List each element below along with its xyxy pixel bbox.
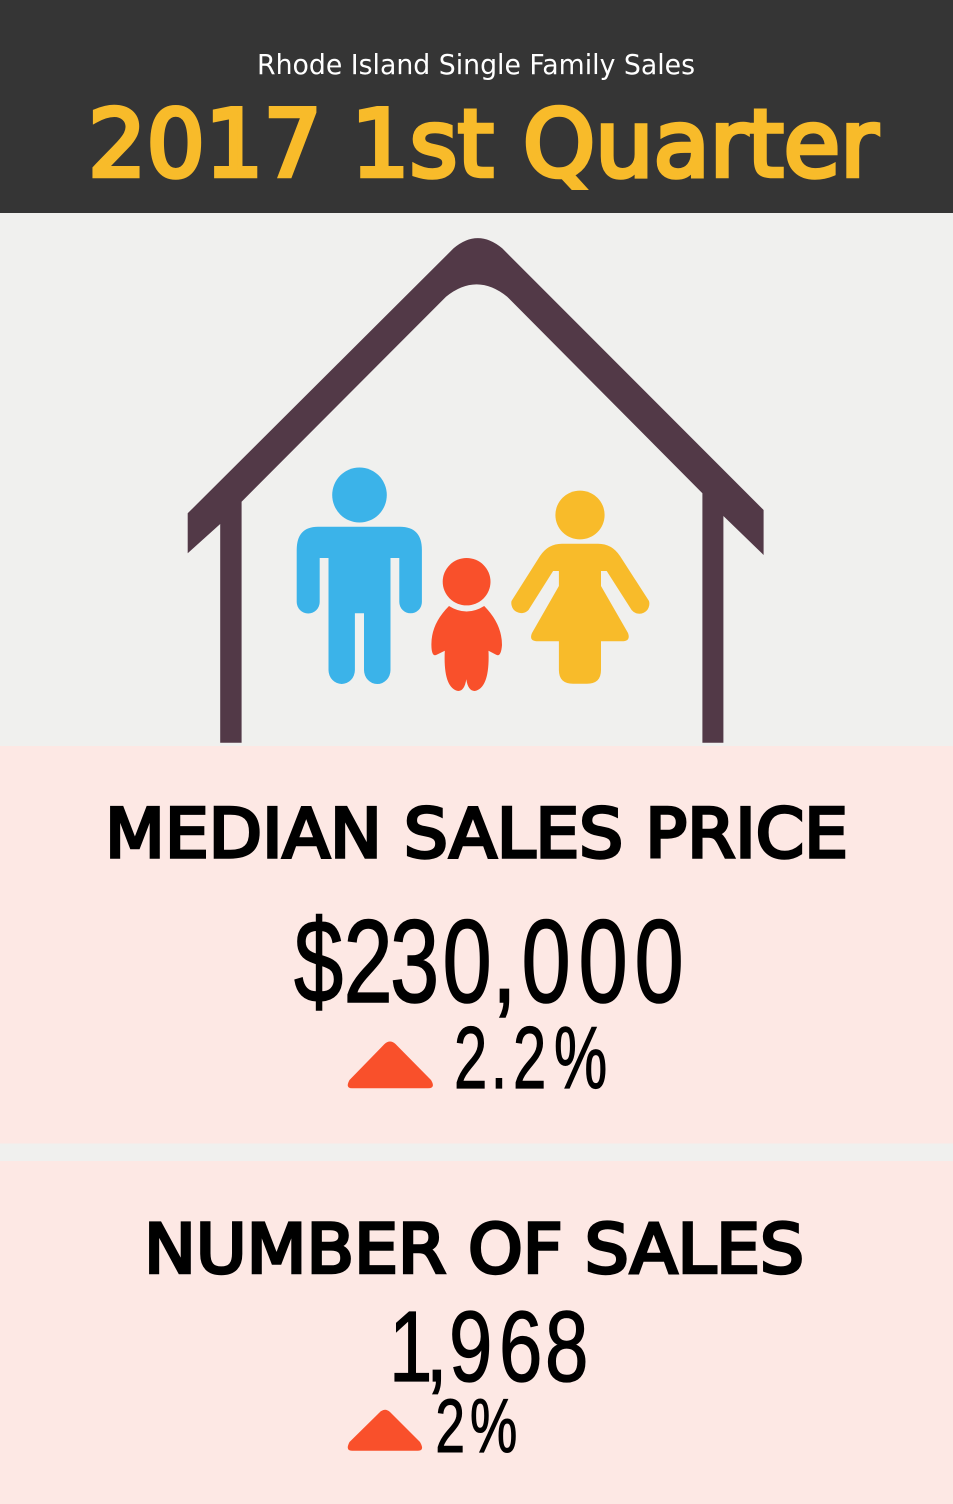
value: sales change: 2% [435, 1384, 517, 1468]
icon: woman [511, 491, 649, 684]
heading: number of sales: NUMBER OF SALES [144, 1210, 804, 1290]
icon: up arrow [348, 1410, 422, 1451]
value: price change: 2.2% [454, 1008, 607, 1107]
heading: median sales price: MEDIAN SALES PRICE [105, 795, 848, 874]
value: price: $230,000 [294, 897, 684, 1028]
value: sales count: 1,968 [389, 1292, 588, 1403]
panel: median sales price [0, 746, 953, 1144]
house illustration with family [188, 238, 764, 743]
panel: number of sales [0, 1161, 953, 1504]
header band [0, 0, 953, 213]
icon: up arrow [348, 1042, 433, 1088]
title: 2017 1st Quarter [88, 90, 879, 198]
icon: child [431, 558, 502, 691]
icon: man [297, 468, 422, 684]
subtitle: Rhode Island Single Family Sales [257, 48, 695, 81]
icon: house outline [188, 238, 764, 743]
